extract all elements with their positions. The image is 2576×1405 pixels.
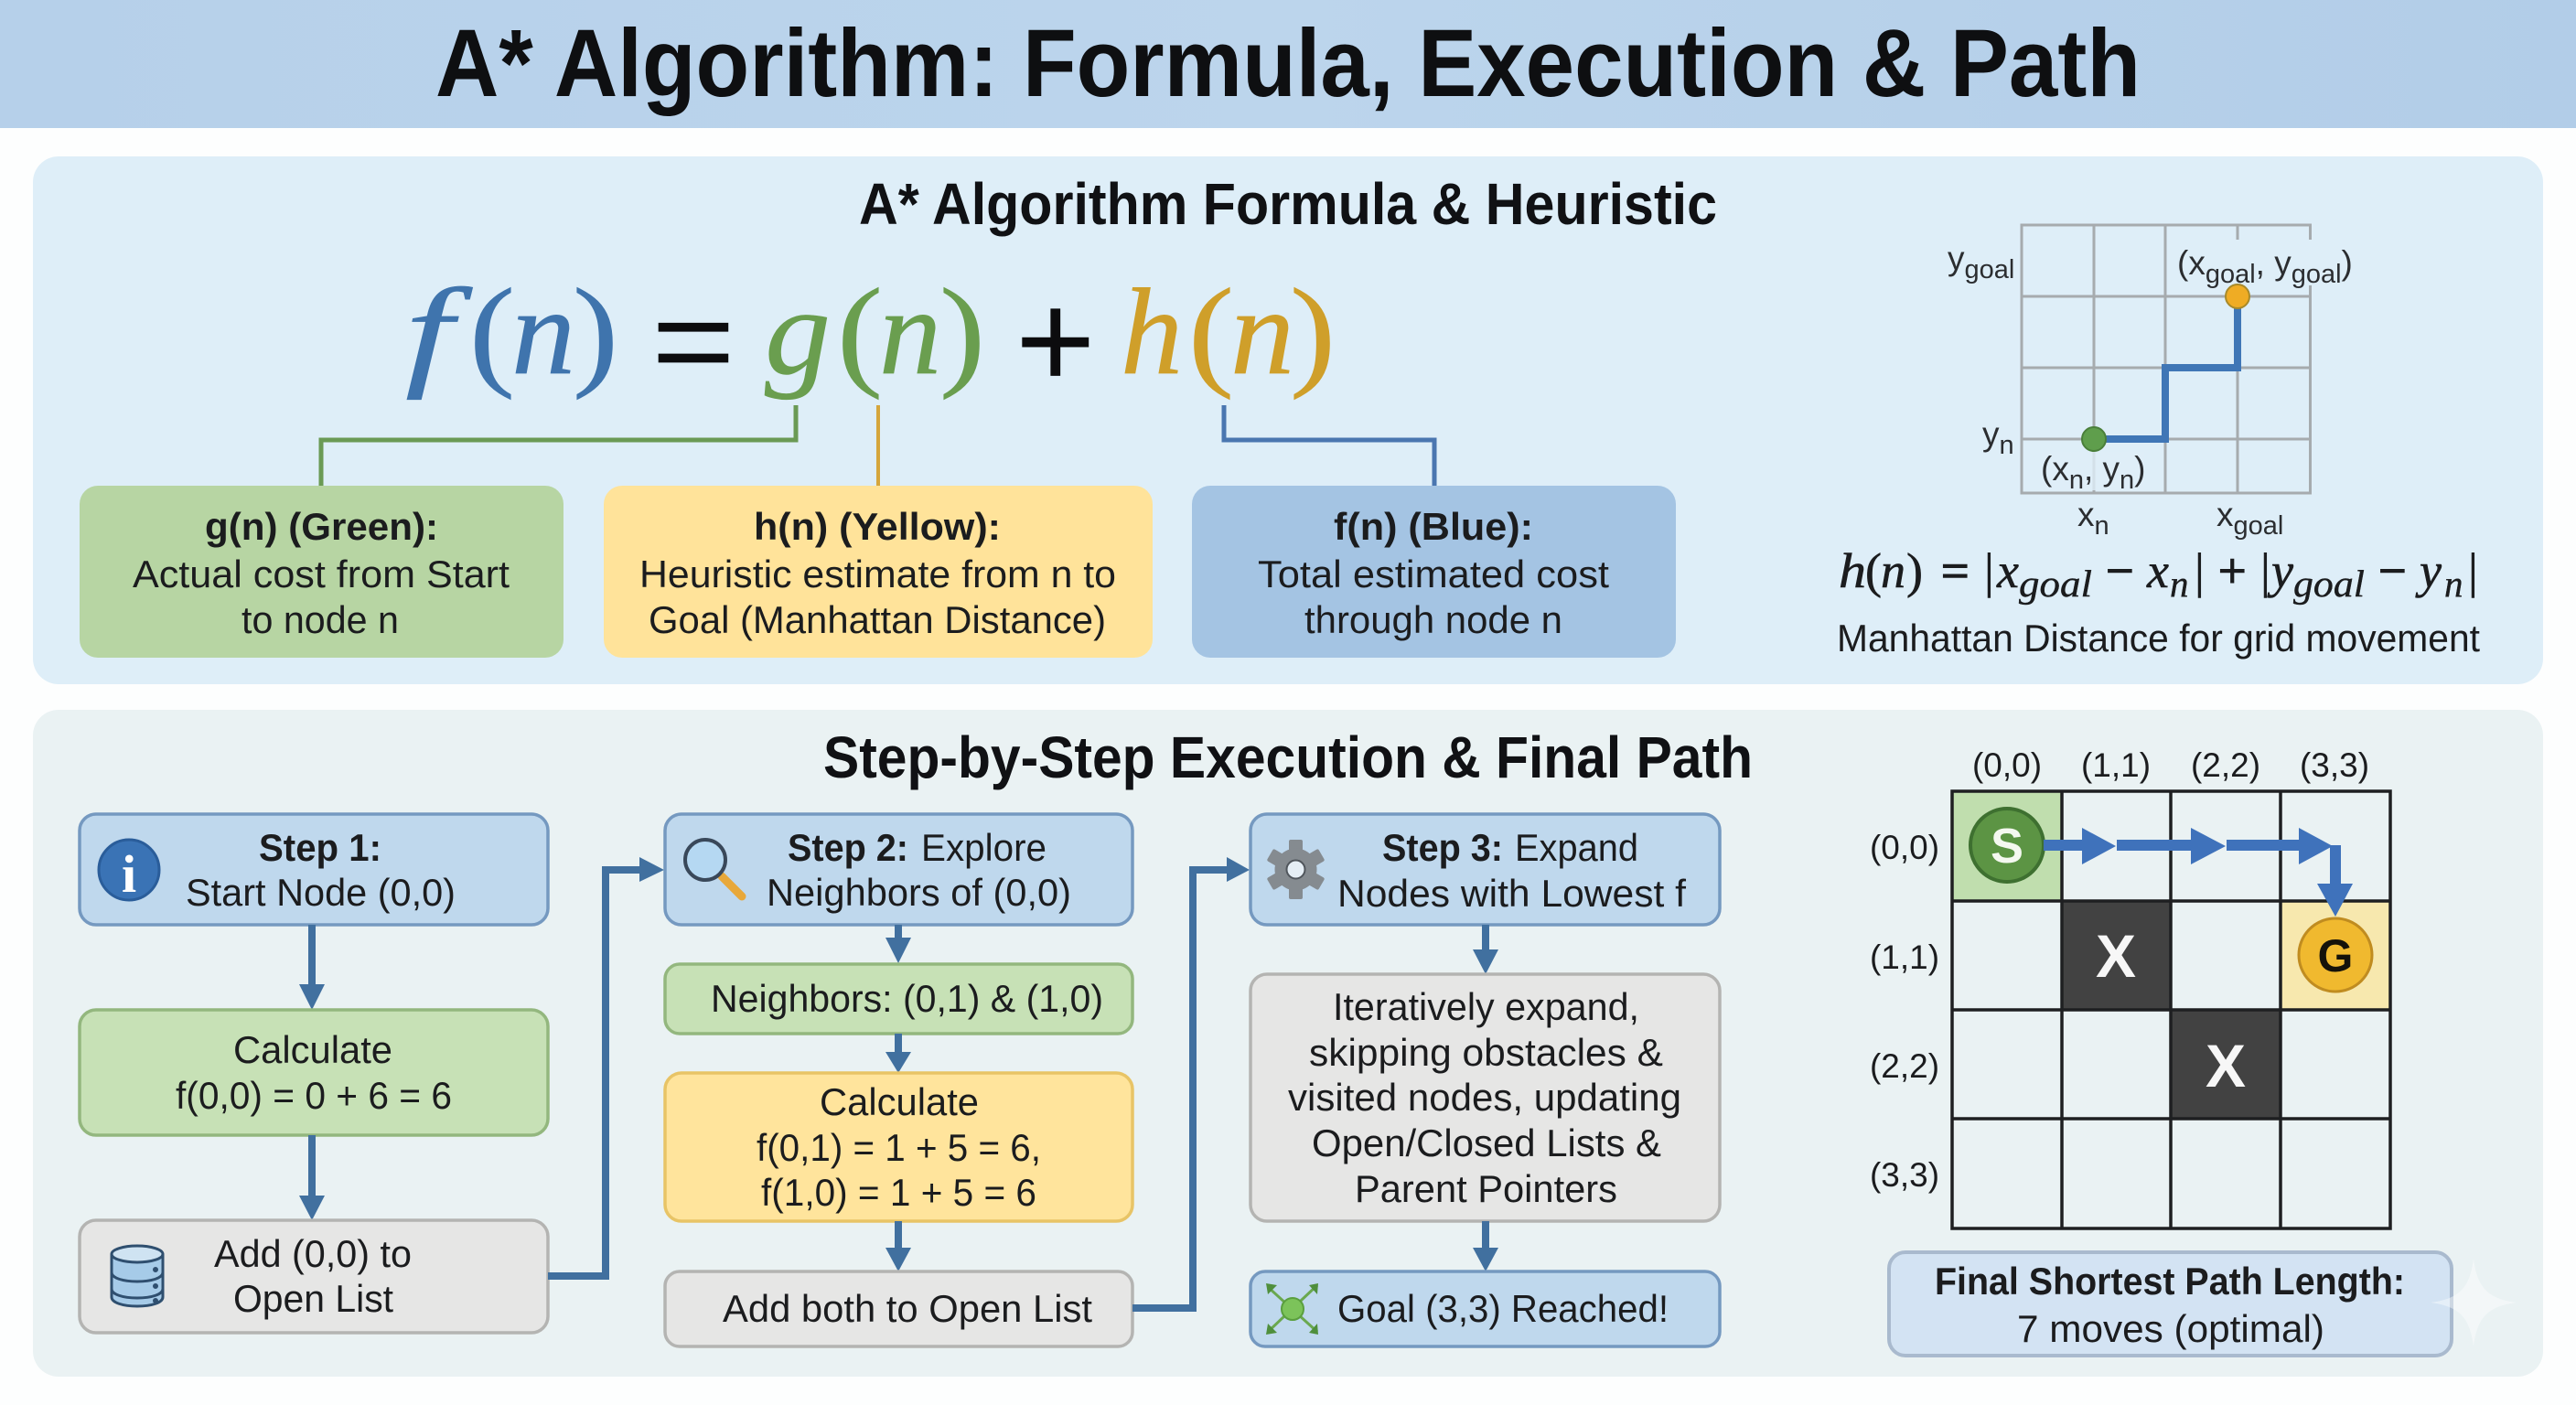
row labels bbox=[1870, 829, 1939, 1194]
formula: Manhattan heuristic: goal bbox=[2019, 563, 2092, 605]
box: goal reached: Goal (3,3) Reached! bbox=[1337, 1287, 1669, 1330]
panel: step-by-step execution bbox=[33, 710, 2543, 1377]
box: add to open list: Open List bbox=[233, 1277, 393, 1320]
column labels: (1,1) bbox=[2081, 746, 2151, 784]
step 3 box: Expand bbox=[1515, 826, 1638, 869]
column labels bbox=[1972, 746, 2369, 784]
icon: database bbox=[112, 1246, 163, 1306]
panel: formula and heuristic bbox=[33, 156, 2543, 684]
main formula: n bbox=[1230, 264, 1294, 401]
main formula: = bbox=[651, 272, 735, 410]
main formula: n bbox=[511, 264, 575, 401]
column labels: (0,0) bbox=[1972, 746, 2042, 784]
box: h(n) yellow: Heuristic estimate from n to bbox=[639, 552, 1116, 595]
chart: Manhattan distance grid: n bbox=[2000, 431, 2014, 460]
formula: Manhattan heuristic: | bbox=[2260, 543, 2270, 598]
start node S: S bbox=[1991, 819, 2023, 874]
main formula: ( bbox=[469, 264, 515, 401]
chart: Manhattan distance grid: goal bbox=[1965, 255, 2014, 284]
obstacle X marks bbox=[2096, 922, 2246, 1099]
step 2 box: Neighbors of (0,0) bbox=[767, 871, 1071, 914]
arrow: step 3 to iterate bbox=[1473, 925, 1498, 974]
formula: Manhattan heuristic: y bbox=[2415, 543, 2442, 598]
arrow: iterate to goal bbox=[1473, 1221, 1498, 1271]
chart: Manhattan distance grid: y bbox=[1948, 240, 1965, 277]
start node S bbox=[1970, 809, 2044, 882]
formula: Manhattan heuristic: | bbox=[1984, 543, 1994, 598]
heading: formula section: A* Algorithm Formula & Heuristic bbox=[859, 171, 1717, 237]
step 2 box: Step 2: bbox=[788, 826, 908, 869]
step 1 box: Step 1: bbox=[259, 826, 381, 869]
formula: Manhattan heuristic: + bbox=[2218, 543, 2246, 598]
arrow: step 2 column to step 3 bbox=[1132, 857, 1250, 1308]
obstacle cell 2 bbox=[2171, 1010, 2281, 1119]
connector: g(n) to green box bbox=[321, 405, 796, 486]
step 1 box bbox=[80, 814, 548, 925]
box: h(n) yellow: h(n) (Yellow): bbox=[754, 505, 1001, 548]
start cell bbox=[1952, 791, 2062, 901]
formula: Manhattan heuristic: n bbox=[1881, 543, 1905, 598]
arrow: neighbors to calculate bbox=[886, 1034, 911, 1073]
chart: Manhattan distance grid: goal bbox=[2292, 260, 2342, 289]
arrow: step 2 to neighbors bbox=[886, 925, 911, 963]
main formula: ) bbox=[573, 264, 618, 401]
box: g(n) green: to node n bbox=[242, 598, 399, 641]
chart: Manhattan distance grid: x bbox=[2077, 496, 2095, 533]
box: add to open list: Add (0,0) to bbox=[214, 1232, 412, 1275]
formula: Manhattan heuristic: x bbox=[1996, 543, 2019, 598]
callout: final path length: Final Shortest Path Length: bbox=[1935, 1260, 2405, 1303]
main formula: ) bbox=[939, 264, 985, 401]
main formula: ( bbox=[1188, 264, 1234, 401]
callout: final path length bbox=[1889, 1252, 2452, 1356]
formula: Manhattan heuristic: ( bbox=[1865, 543, 1882, 598]
box: f(n) blue bbox=[1192, 486, 1676, 658]
box: g(n) green: g(n) (Green): bbox=[205, 505, 438, 548]
chart: Manhattan distance grid: (x bbox=[2041, 450, 2069, 488]
formula: Manhattan heuristic: − bbox=[2378, 543, 2406, 598]
icon: gear bbox=[1267, 840, 1325, 899]
icon: info: i bbox=[122, 844, 136, 904]
arrow: step 1 column to step 2 bbox=[548, 857, 664, 1276]
arrow: calculate to add both bbox=[886, 1221, 911, 1271]
chart: Manhattan distance grid: goal bbox=[2234, 511, 2283, 541]
formula: Manhattan heuristic: − bbox=[2106, 543, 2133, 598]
title banner: A* Algorithm: Formula, Execution & Path bbox=[435, 10, 2141, 117]
title banner bbox=[0, 0, 2576, 128]
chart: Manhattan distance grid: , y bbox=[2084, 450, 2120, 488]
chart: Manhattan distance grid: ) bbox=[2134, 450, 2146, 488]
box: f(n) blue: f(n) (Blue): bbox=[1334, 505, 1533, 548]
path arrows bbox=[2044, 828, 2353, 917]
formula: Manhattan heuristic: n bbox=[2444, 563, 2463, 605]
box: add both: Add both to Open List bbox=[723, 1287, 1092, 1330]
box: iterate bbox=[1250, 974, 1720, 1221]
obstacle cell 1 bbox=[2062, 901, 2171, 1010]
formula: Manhattan heuristic: | bbox=[2468, 543, 2478, 598]
formula: Manhattan heuristic: | bbox=[2195, 543, 2205, 598]
chart: final path grid bbox=[1870, 746, 2390, 1228]
row labels: (3,3) bbox=[1870, 1156, 1939, 1194]
box: iterate: Iteratively expand, bbox=[1333, 985, 1639, 1028]
chart: Manhattan distance grid: n bbox=[2069, 466, 2084, 495]
step 2 box bbox=[665, 814, 1132, 925]
box: iterate: Open/Closed Lists & bbox=[1312, 1121, 1661, 1164]
formula: Manhattan heuristic: n bbox=[2170, 563, 2188, 605]
box: calculate f(0,0): Calculate bbox=[233, 1028, 392, 1071]
main formula: h bbox=[1121, 264, 1183, 401]
formula: Manhattan heuristic: h bbox=[1839, 543, 1866, 598]
row labels: (1,1) bbox=[1870, 938, 1939, 976]
icon: info bbox=[99, 840, 159, 904]
step 3 box bbox=[1250, 814, 1720, 925]
formula: Manhattan heuristic: goal bbox=[2293, 563, 2365, 605]
icon: goal arrows bbox=[1266, 1283, 1318, 1335]
main formula: n bbox=[879, 264, 941, 401]
chart: Manhattan distance grid: goal bbox=[2206, 260, 2256, 289]
box: h(n) yellow: Goal (Manhattan Distance) bbox=[649, 598, 1106, 641]
chart: Manhattan distance grid: x bbox=[2216, 496, 2234, 533]
box: calculate neighbors: f(0,1) = 1 + 5 = 6, bbox=[757, 1126, 1041, 1169]
chart: Manhattan distance grid: y bbox=[1982, 415, 2000, 453]
arrow: calculate to open list bbox=[299, 1135, 325, 1220]
formula: Manhattan heuristic: = bbox=[1941, 543, 1969, 598]
formula: Manhattan heuristic bbox=[1839, 543, 2478, 605]
box: goal reached bbox=[1250, 1271, 1720, 1346]
main formula: f bbox=[405, 264, 474, 401]
goal node G: G bbox=[2318, 930, 2353, 981]
formula: Manhattan heuristic: y bbox=[2267, 543, 2293, 598]
box: g(n) green bbox=[80, 486, 564, 658]
box: iterate: Parent Pointers bbox=[1355, 1167, 1617, 1210]
chart: Manhattan distance grid: , y bbox=[2256, 244, 2292, 282]
heading: execution section: Step-by-Step Execution & Final Path bbox=[823, 724, 1753, 790]
chart: Manhattan distance grid bbox=[1948, 225, 2353, 541]
box: f(n) blue: Total estimated cost bbox=[1258, 552, 1609, 595]
obstacle X marks: X bbox=[2096, 922, 2136, 990]
main formula: ( bbox=[837, 264, 883, 401]
box: calculate neighbors bbox=[665, 1073, 1132, 1221]
goal cell bbox=[2281, 901, 2390, 1010]
box: h(n) yellow bbox=[604, 486, 1153, 658]
box: neighbors bbox=[665, 964, 1132, 1034]
box: calculate f(0,0) bbox=[80, 1010, 548, 1135]
chart: Manhattan distance grid: ) bbox=[2342, 244, 2353, 282]
box: calculate neighbors: Calculate bbox=[820, 1080, 979, 1123]
main formula: g bbox=[765, 264, 831, 401]
box: iterate: visited nodes, updating bbox=[1288, 1076, 1681, 1119]
formula: Manhattan heuristic: ) bbox=[1906, 543, 1923, 598]
row labels: (0,0) bbox=[1870, 829, 1939, 866]
box: add both bbox=[665, 1271, 1132, 1346]
chart: Manhattan distance grid: (x bbox=[2177, 244, 2206, 282]
main formula bbox=[405, 263, 1336, 417]
obstacle X marks: X bbox=[2206, 1032, 2246, 1099]
box: add to open list bbox=[80, 1220, 548, 1333]
row labels: (2,2) bbox=[1870, 1047, 1939, 1085]
chart: Manhattan distance grid: n bbox=[2120, 466, 2134, 495]
step 2 box: Explore bbox=[921, 826, 1046, 869]
connector: h(n) to yellow box bbox=[876, 405, 880, 486]
column labels: (3,3) bbox=[2300, 746, 2369, 784]
callout: final path length: 7 moves (optimal) bbox=[2017, 1307, 2324, 1350]
box: g(n) green: Actual cost from Start bbox=[133, 552, 510, 595]
arrow: step 1 to calculate bbox=[299, 925, 325, 1010]
icon: magnifier bbox=[685, 840, 742, 896]
box: calculate neighbors: f(1,0) = 1 + 5 = 6 bbox=[761, 1171, 1036, 1214]
step 1 box: Start Node (0,0) bbox=[186, 871, 456, 914]
goal node G bbox=[2299, 918, 2372, 992]
box: iterate: skipping obstacles & bbox=[1309, 1031, 1663, 1074]
box: f(n) blue: through node n bbox=[1304, 598, 1562, 641]
step 3 box: Step 3: bbox=[1382, 826, 1503, 869]
box: calculate f(0,0): f(0,0) = 0 + 6 = 6 bbox=[176, 1074, 452, 1117]
main formula: + bbox=[1015, 263, 1096, 417]
chart: Manhattan distance grid: n bbox=[2095, 511, 2109, 541]
sparkle mark bbox=[2431, 1259, 2517, 1346]
caption: Manhattan distance: Manhattan Distance for grid movement bbox=[1837, 617, 2480, 660]
column labels: (2,2) bbox=[2191, 746, 2260, 784]
main formula: ) bbox=[1290, 264, 1336, 401]
box: neighbors: Neighbors: (0,1) & (1,0) bbox=[711, 977, 1103, 1020]
connector: f(n) to blue box bbox=[1224, 405, 1434, 486]
step 3 box: Nodes with Lowest f bbox=[1337, 872, 1686, 915]
formula: Manhattan heuristic: x bbox=[2146, 543, 2169, 598]
